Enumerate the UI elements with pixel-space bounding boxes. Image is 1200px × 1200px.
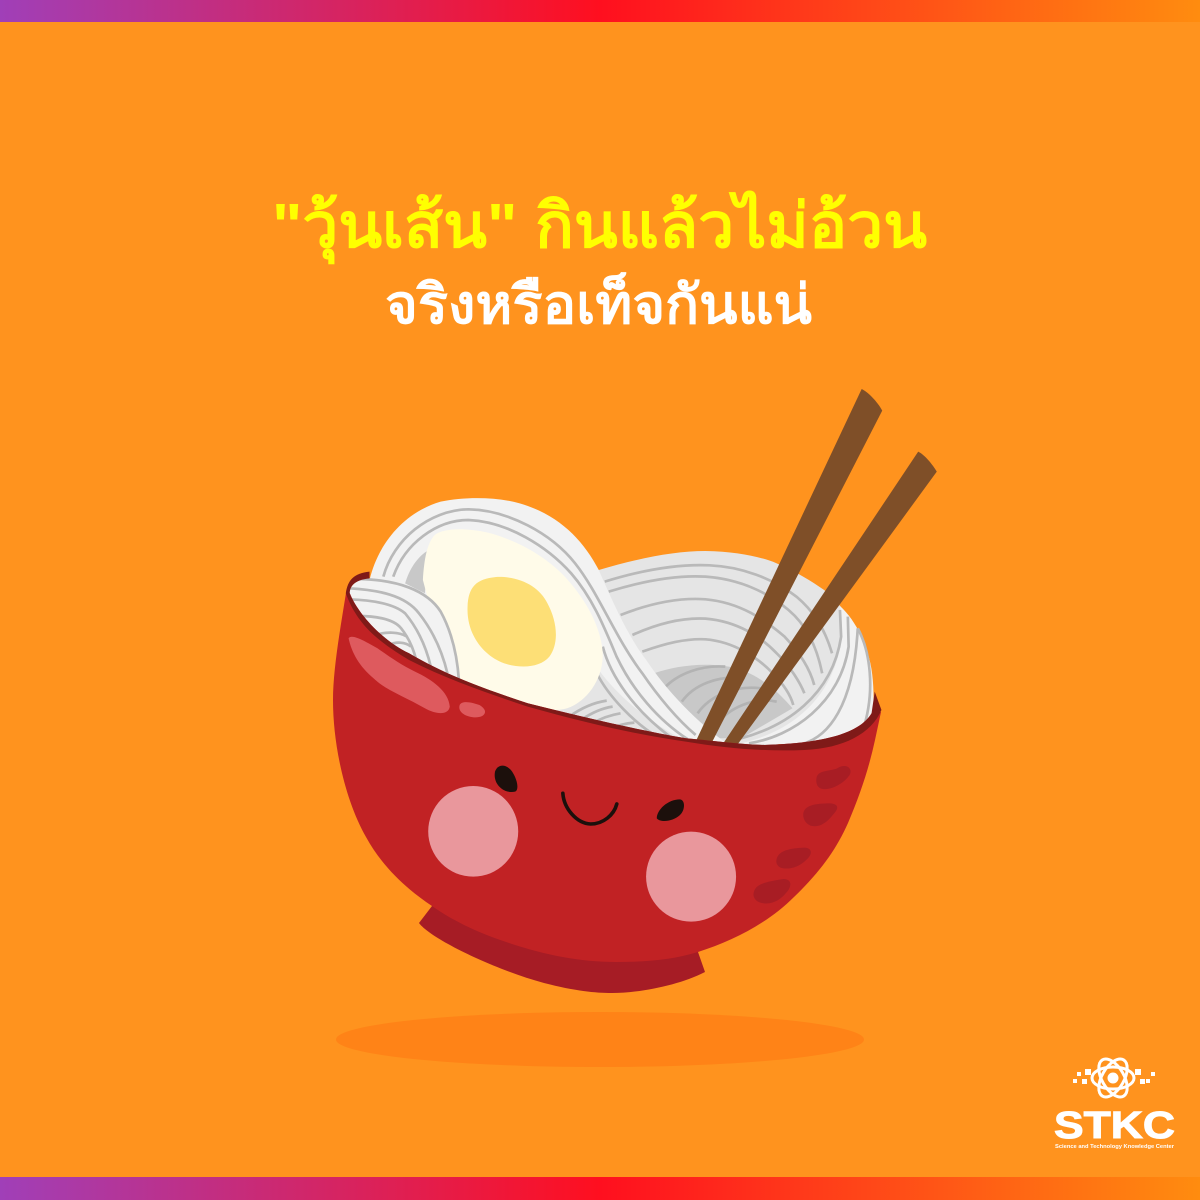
loop strands [383,509,696,739]
right noodle mound [599,551,873,745]
right eye [657,799,684,821]
left cheek [428,786,518,877]
left eye [495,766,517,792]
bowl highlights [349,637,485,717]
bowl foot [419,906,705,993]
title [272,190,927,335]
noodles and egg [349,389,937,748]
right mound noodle strands [605,565,832,705]
illustration: noodle bowl [333,389,937,993]
logo dots [1073,1069,1155,1084]
grey behind egg [405,550,429,593]
bowl rim lip [346,572,881,750]
ground shadow [336,1012,864,1067]
mouth [563,793,617,824]
title line 1: "วุ้นเส้น" กินแล้วไม่อ้วน [272,190,927,264]
top gradient bar [0,0,1200,22]
under-egg strands [569,701,634,728]
spot 4 [753,879,790,903]
left back noodle loop [370,498,729,745]
spot 3 [776,848,811,869]
chopstick 2 [723,452,937,745]
logo atom icon [1092,1054,1134,1102]
left front noodle [349,579,460,682]
small highlight [459,702,485,717]
right cheek [646,832,736,922]
right front noodle coil [741,606,874,744]
spot 1 [816,766,851,789]
bottom gradient bar [0,1177,1200,1200]
inner noodle strands [664,666,777,723]
egg yolk [468,577,556,666]
left front noodle strands [349,579,459,680]
bowl face [428,766,851,922]
logo tagline: Science and Technology Knowledge Center [1055,1144,1175,1150]
egg white [423,529,603,710]
spot 2 [803,803,837,826]
right coil strands [741,610,870,744]
logo: STKC [1054,1054,1175,1150]
logo wordmark: STKC [1054,1105,1175,1147]
noodle base fill [350,570,872,748]
side spots [753,766,851,903]
bowl body [333,593,881,962]
chopstick 1 [696,389,882,743]
large highlight [349,637,450,713]
inner noodle shadow [654,665,793,738]
title line 2: จริงหรือเท็จกันแน่ [385,273,812,335]
